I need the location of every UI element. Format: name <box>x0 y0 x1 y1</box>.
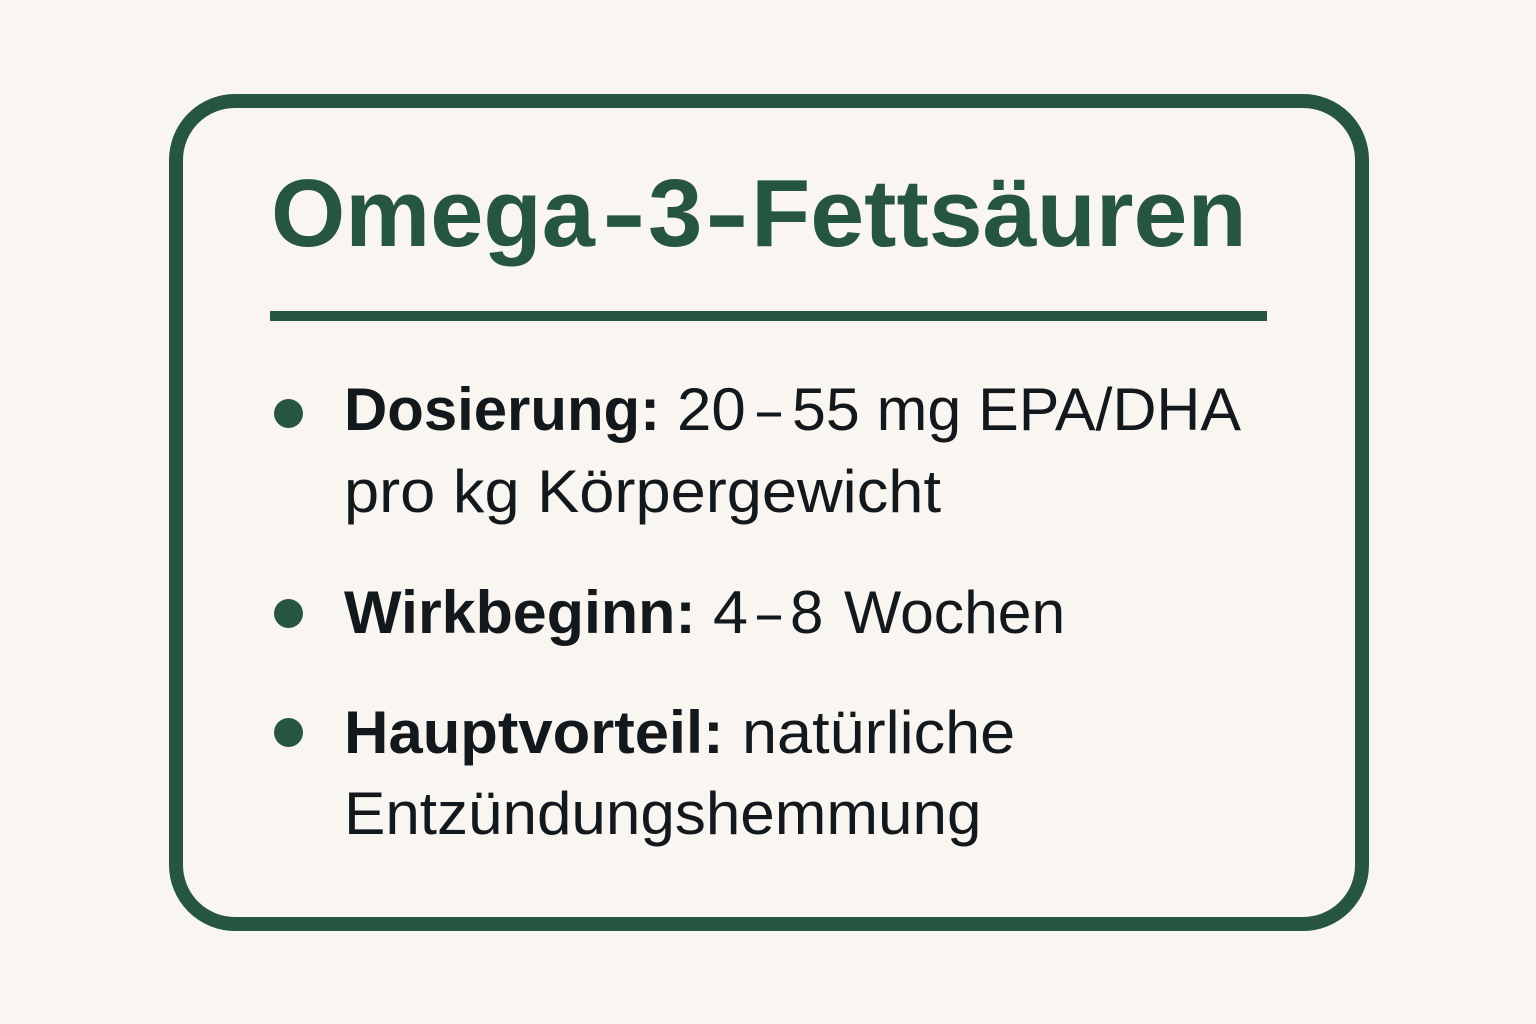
text: Wirkbeginn <box>344 579 1065 646</box>
text: Dosierung <box>344 376 1241 443</box>
text: Dosierung line 2: pro kg Körpergewicht <box>344 458 941 525</box>
text: Dosierung: 55 mg EPA/DHA <box>792 376 1241 443</box>
text: Wirkbeginn: – <box>757 579 781 646</box>
text: Hauptvorteil <box>344 699 1015 766</box>
text: Wirkbeginn: Wirkbeginn: <box>344 579 696 646</box>
text: Dosierung: – <box>757 376 781 443</box>
title: Fettsäuren <box>751 160 1247 267</box>
text: Hauptvorteil line 2: Entzündungshemmung <box>344 780 981 847</box>
text: Wirkbeginn: Wochen <box>844 579 1065 646</box>
divider under title <box>270 311 1267 321</box>
text: Wirkbeginn: 4 <box>713 579 748 646</box>
text: Hauptvorteil: Hauptvorteil: <box>344 699 724 766</box>
text: Hauptvorteil: natürliche <box>742 699 1015 766</box>
title <box>271 160 1247 267</box>
text: Wirkbeginn: 8 <box>790 579 823 646</box>
bullet icon: Hauptvorteil <box>274 718 303 747</box>
title: Omega <box>271 160 595 267</box>
text: Dosierung: Dosierung: <box>344 376 660 443</box>
panel: card <box>169 94 1369 931</box>
title: 3 <box>648 160 702 267</box>
text: Dosierung: 20 <box>677 376 746 443</box>
bullet icon: Wirkbeginn <box>274 599 303 628</box>
bullet icon: Dosierung <box>274 399 303 428</box>
title: - <box>705 160 749 267</box>
title: - <box>602 160 646 267</box>
